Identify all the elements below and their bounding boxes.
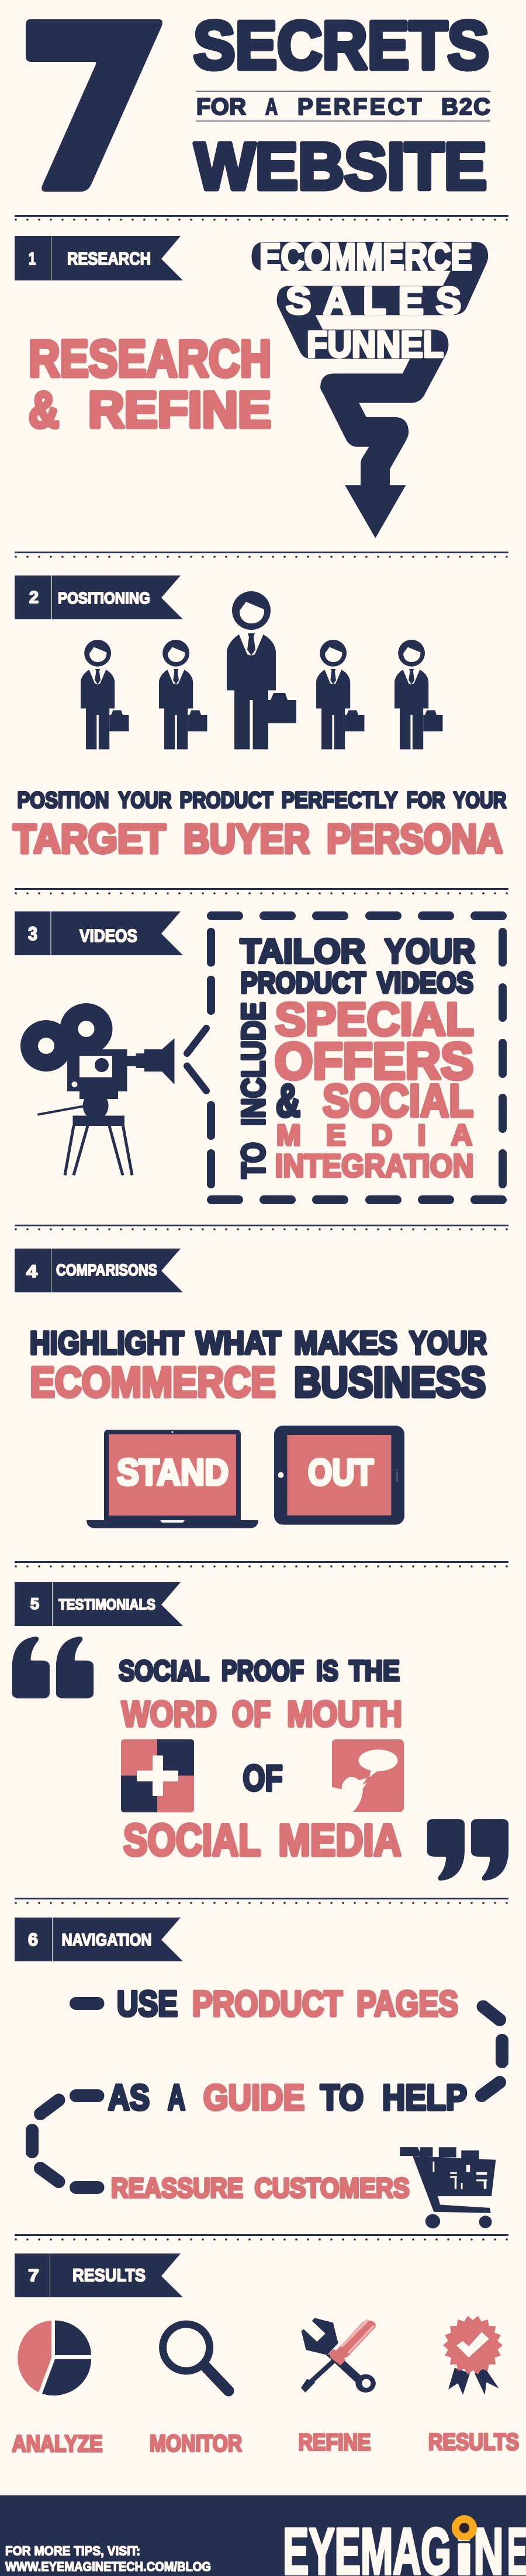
footer text: more tips: WWW.EYEMAGINETECH.COM/BLOG — [5, 2559, 211, 2574]
icon: film camera — [20, 1003, 174, 1176]
callout text: tailor your product videos: INCLUDE — [235, 1002, 271, 1126]
text: highlight what makes your — [30, 1325, 487, 1361]
text: as a guide to help: HELP — [382, 2078, 467, 2117]
ribbon: 4 comparisons: COMPARISONS — [56, 1261, 157, 1279]
heading: word of mouth: MOUTH — [287, 1694, 402, 1734]
ribbon: 7 results — [15, 2253, 183, 2297]
text: social proof is the — [119, 1656, 400, 1687]
heading: target buyer persona — [13, 816, 503, 861]
text: use product pages: PRODUCT — [192, 1984, 342, 2024]
label: analyze: ANALYZE — [12, 2431, 103, 2457]
icon: closing quote — [427, 1819, 508, 1881]
panel: videos — [15, 911, 507, 1204]
footer band — [0, 2495, 526, 2576]
icon: business people — [81, 591, 442, 749]
funnel diagram: SALES — [286, 279, 461, 322]
text: as a guide to help: GUIDE — [203, 2078, 304, 2117]
ribbon: 7 results: 7 — [28, 2266, 39, 2286]
heading: research and refine: RESEARCH — [29, 330, 271, 387]
ribbon: 6 navigation: NAVIGATION — [62, 1931, 152, 1950]
subtitle: for a perfect b2c: B2C — [441, 94, 490, 120]
subtitle: for a perfect b2c — [196, 91, 490, 122]
icon: twitter bird tile — [330, 1739, 404, 1813]
ribbon: 6 navigation — [15, 1918, 183, 1961]
heading: social media: SOCIAL — [123, 1816, 261, 1865]
dashed path — [32, 2003, 502, 2187]
text: position your product: PERFECTLY — [282, 788, 397, 813]
heading: word of mouth — [122, 1694, 402, 1734]
callout text: tailor your product videos: OFFERS — [275, 1033, 473, 1090]
text: use product pages: USE — [117, 1984, 178, 2024]
text: of: OF — [243, 1759, 283, 1798]
callout text: tailor your product videos: VIDEOS — [377, 966, 473, 999]
title: secrets: SECRETS — [193, 7, 489, 83]
icon: magnifying glass — [163, 2324, 229, 2391]
icon: award badge — [443, 2316, 503, 2395]
text: highlight what makes your: MAKES — [294, 1325, 397, 1361]
panel: navigation — [15, 1918, 502, 2228]
callout text: tailor your product videos: YOUR — [385, 932, 475, 970]
text: reassure customers — [111, 2173, 410, 2204]
heading: ecommerce business: BUSINESS — [294, 1359, 486, 1406]
heading: research and refine: REFINE — [88, 382, 271, 438]
text: position your product: YOUR — [454, 788, 506, 813]
text: reassure customers: CUSTOMERS — [255, 2173, 410, 2204]
icon: laptop stand: STAND — [117, 1452, 229, 1493]
callout text: tailor your product videos: MEDIA — [276, 1119, 472, 1152]
ribbon: 4 comparisons: 4 — [26, 1262, 37, 1281]
icon: tablet out: OUT — [308, 1452, 373, 1493]
ribbon: 3 videos: VIDEOS — [79, 925, 137, 946]
footer text: more tips — [5, 2544, 211, 2574]
funnel diagram: FUNNEL — [307, 324, 444, 365]
text: social proof is the: THE — [349, 1656, 400, 1687]
big numeral seven — [26, 19, 162, 192]
text: highlight what makes your: WHAT — [196, 1325, 281, 1361]
ribbon: 7 results: RESULTS — [72, 2265, 146, 2286]
icon: opening quote — [12, 1637, 94, 1698]
subtitle: for a perfect b2c: A — [265, 94, 278, 120]
text: social proof is the: SOCIAL — [119, 1656, 209, 1687]
dashed callout border — [207, 911, 507, 1204]
subtitle: for a perfect b2c: PERFECT — [297, 94, 421, 120]
ribbon: 3 videos: 3 — [28, 923, 37, 944]
text: position your product: YOUR — [118, 788, 172, 813]
ribbon: 1 research: 1 — [29, 248, 36, 269]
ribbon: 2 positioning: POSITIONING — [58, 589, 150, 607]
heading: research and refine — [29, 330, 271, 438]
text: as a guide to help: TO — [320, 2078, 364, 2117]
text: position your product: PRODUCT — [180, 788, 274, 813]
ribbon: 4 comparisons — [15, 1249, 183, 1292]
heading: social media — [123, 1816, 401, 1865]
text: as a guide to help — [108, 2078, 467, 2117]
ribbon: 3 videos — [15, 911, 183, 955]
text: use product pages: PAGES — [357, 1984, 458, 2024]
footer text: more tips: FOR MORE TIPS, VISIT: — [5, 2544, 140, 2558]
title header — [26, 7, 490, 203]
icon: pie chart — [18, 2321, 91, 2395]
heading: target buyer persona: TARGET — [13, 816, 166, 861]
text: position your product: FOR — [407, 788, 445, 813]
callout text: tailor your product videos: TAILOR — [240, 932, 365, 970]
panel: positioning — [13, 575, 506, 861]
ribbon: 1 research — [15, 236, 183, 280]
ribbon: 1 research: RESEARCH — [67, 248, 151, 269]
ribbon: 6 navigation: 6 — [28, 1929, 38, 1950]
text: position your product: POSITION — [18, 788, 109, 813]
text: social proof is the: PROOF — [222, 1656, 304, 1687]
ribbon: 2 positioning: 2 — [29, 588, 39, 607]
callout text: tailor your product videos: & — [276, 1075, 300, 1126]
icon: shopping cart — [400, 2147, 496, 2228]
label: refine: REFINE — [298, 2429, 371, 2455]
funnel diagram: ECOMMERCE — [259, 236, 472, 278]
heading: ecommerce business — [30, 1359, 486, 1406]
ribbon: 5 testimonials: 5 — [30, 1595, 39, 1613]
panel: comparisons — [15, 1249, 487, 1528]
heading: target buyer persona: BUYER — [184, 816, 310, 861]
text: highlight what makes your: YOUR — [409, 1325, 487, 1361]
text: reassure customers: REASSURE — [111, 2173, 243, 2204]
text: use product pages — [117, 1984, 458, 2024]
heading: word of mouth: WORD — [122, 1694, 217, 1734]
icon: laptop stand — [86, 1430, 258, 1528]
callout text: tailor your product videos — [235, 932, 475, 1184]
ribbon: 5 testimonials — [15, 1582, 183, 1626]
icon: tablet out — [274, 1426, 404, 1525]
text: social proof is the: IS — [316, 1656, 338, 1687]
title: website: WEBSITE — [195, 130, 487, 203]
callout text: tailor your product videos: INTEGRATION — [275, 1147, 473, 1184]
label: monitor: MONITOR — [150, 2431, 242, 2456]
icon: google plus tile — [121, 1739, 194, 1812]
heading: social media: MEDIA — [278, 1816, 401, 1865]
callout text: tailor your product videos: SPECIAL — [275, 993, 474, 1045]
subtitle: for a perfect b2c: FOR — [196, 94, 246, 120]
ribbon: 5 testimonials: TESTIMONIALS — [58, 1596, 155, 1613]
ribbon: 2 positioning — [15, 575, 183, 619]
text: position your product — [18, 788, 506, 813]
text: as a guide to help: A — [168, 2078, 185, 2117]
heading: ecommerce business: ECOMMERCE — [30, 1359, 276, 1406]
funnel diagram — [251, 236, 488, 538]
text: highlight what makes your: HIGHLIGHT — [30, 1325, 184, 1361]
callout text: tailor your product videos: PRODUCT — [241, 966, 366, 999]
heading: word of mouth: OF — [232, 1694, 271, 1734]
text: as a guide to help: AS — [108, 2078, 150, 2117]
heading: target buyer persona: PERSONA — [327, 816, 503, 861]
panel: research — [15, 236, 488, 538]
icon: wrench and screwdriver — [301, 2318, 376, 2393]
callout text: tailor your product videos: SOCIAL — [323, 1075, 473, 1126]
panel: results — [12, 2253, 519, 2457]
callout text: tailor your product videos: TO — [235, 1142, 271, 1178]
panel: testimonials — [12, 1582, 508, 1881]
icon: projection beams — [187, 1028, 206, 1091]
heading: research and refine: & — [29, 382, 59, 438]
